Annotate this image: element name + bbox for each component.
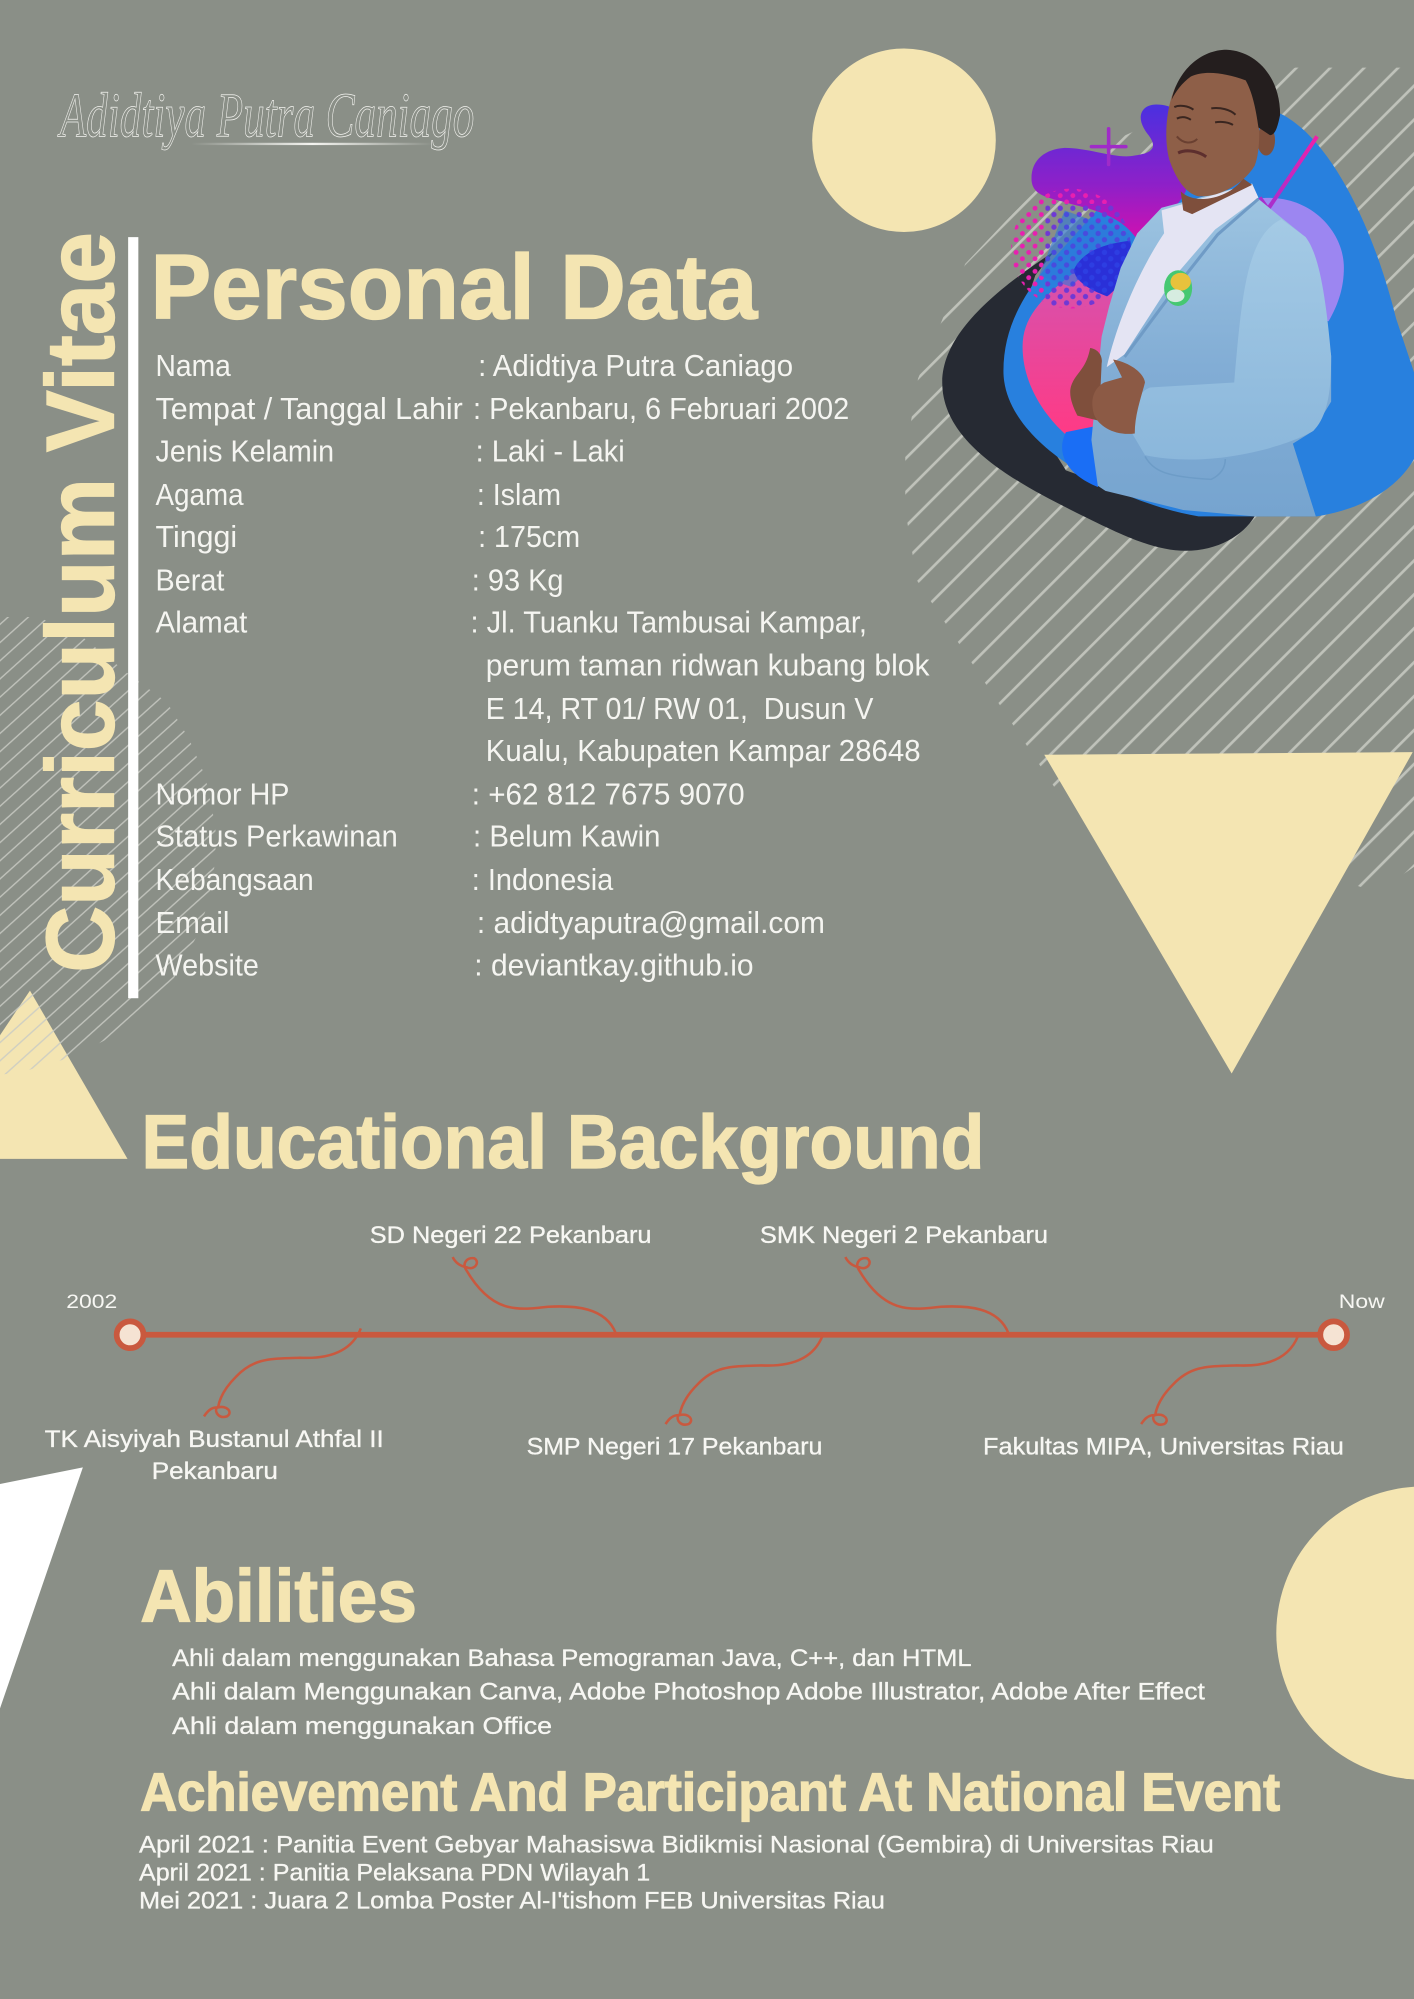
halftone dots	[1011, 188, 1131, 308]
jacket	[1091, 184, 1331, 516]
hair	[1172, 50, 1280, 135]
connector: SMK	[845, 1257, 1009, 1334]
achievement 1: April 2021 : Panitia Event Gebyar Mahasiswa Bidikmisi Nasional (Gembira) di Universitas Riau	[139, 1831, 1214, 1858]
row: jenis kelamin: Jenis Kelamin	[156, 435, 334, 469]
row: agama: Agama	[156, 478, 244, 512]
blue blob	[1003, 112, 1414, 516]
sleeve	[1132, 219, 1331, 459]
hatch pattern right	[905, 68, 1414, 892]
row: alamat	[156, 605, 930, 768]
label: SMP: SMP Negeri 17 Pekanbaru	[527, 1434, 822, 1461]
row: tempat tanggal lahir: : Pekanbaru, 6 Februari 2002	[473, 392, 849, 426]
row: alamat: perum taman ridwan kubang blok	[486, 649, 930, 683]
heading: achievement: Achievement And Participant At National Event	[140, 1763, 1280, 1822]
heading: abilities: Abilities	[140, 1555, 417, 1638]
label: TK: TK Aisyiyah Bustanul Athfal II	[45, 1426, 384, 1453]
label: SMK: SMK Negeri 2 Pekanbaru	[760, 1222, 1048, 1249]
row: agama	[156, 478, 561, 512]
achievement 2: April 2021 : Panitia Pelaksana PDN Wilayah 1	[139, 1859, 650, 1886]
white wedge left	[0, 1467, 83, 1708]
facial features	[1174, 106, 1235, 157]
row: berat: : 93 Kg	[472, 563, 564, 597]
row: email: : adidtyaputra@gmail.com	[477, 906, 825, 940]
violet circle	[1256, 198, 1344, 321]
row: status perkawinan: : Belum Kawin	[473, 820, 660, 854]
label: TK: Pekanbaru	[152, 1458, 278, 1485]
row: kebangsaan: : Indonesia	[472, 863, 613, 897]
row: nomor hp: : +62 812 7675 9070	[472, 777, 745, 811]
connector: Fakultas	[1141, 1336, 1298, 1425]
row: jenis kelamin	[156, 435, 625, 469]
decorative circle top	[812, 48, 996, 232]
badge	[1164, 270, 1192, 306]
row: nomor hp	[156, 777, 745, 811]
heading: personal data: Personal Data	[150, 237, 758, 339]
label: 2002: 2002	[66, 1291, 117, 1313]
row: nama	[156, 349, 793, 383]
plus mark	[1091, 129, 1126, 164]
pink shape	[1023, 273, 1148, 435]
row: tinggi: : 175cm	[478, 520, 580, 554]
row: tempat tanggal lahir	[156, 392, 849, 426]
row: berat: Berat	[156, 563, 225, 597]
purple blob	[1031, 105, 1192, 240]
portrait illustration	[942, 50, 1414, 551]
blue drop	[1062, 421, 1122, 487]
ability 2: Ahli dalam Menggunakan Canva, Adobe Photoshop Adobe Illustrator, Adobe After Effect	[172, 1678, 1205, 1705]
neck	[1181, 178, 1252, 214]
row: tempat tanggal lahir: Tempat / Tanggal Lahir	[156, 392, 463, 426]
row: email: Email	[156, 906, 230, 940]
row: tinggi	[156, 520, 580, 554]
row: alamat: Alamat	[156, 605, 248, 639]
label: TK	[45, 1426, 384, 1485]
ear	[1257, 125, 1275, 156]
lapel line	[1125, 199, 1258, 357]
decorative triangle right	[1044, 752, 1413, 1073]
row: website: : deviantkay.github.io	[474, 948, 754, 982]
label: now: Now	[1339, 1291, 1386, 1313]
ability 1: Ahli dalam menggunakan Bahasa Pemograman Java, C++, dan HTML	[172, 1645, 972, 1672]
row: alamat: Kualu, Kabupaten Kampar 28648	[486, 734, 921, 768]
row: alamat: E 14, RT 01/ RW 01, Dusun V	[486, 692, 874, 726]
decorative triangle left	[0, 991, 128, 1159]
row: jenis kelamin: : Laki - Laki	[476, 435, 625, 469]
heading: educational background: Educational Background	[142, 1100, 984, 1185]
signature: Adidtiya Putra Caniago	[57, 79, 474, 150]
ability 3: Ahli dalam menggunakan Office	[172, 1713, 552, 1740]
row: status perkawinan: Status Perkawinan	[156, 820, 398, 854]
connector: SD	[453, 1257, 616, 1334]
vertical title: Curriculum Vitae	[25, 232, 134, 973]
row: nama: : Adidtiya Putra Caniago	[478, 349, 793, 383]
end marker	[1320, 1321, 1347, 1348]
decorative circle bottom right	[1276, 1487, 1414, 1780]
row: kebangsaan: Kebangsaan	[156, 863, 314, 897]
pocket	[1145, 456, 1225, 479]
label: SD: SD Negeri 22 Pekanbaru	[370, 1222, 652, 1249]
personal data list	[156, 349, 930, 982]
dark blob	[942, 251, 1255, 551]
row: website: Website	[156, 948, 259, 982]
row: email	[156, 906, 825, 940]
timeline axis	[130, 1333, 1334, 1337]
row: kebangsaan	[156, 863, 613, 897]
label: Fakultas: Fakultas MIPA, Universitas Riau	[983, 1434, 1344, 1461]
achievement 3: Mei 2021 : Juara 2 Lomba Poster Al-I'tishom FEB Universitas Riau	[139, 1887, 885, 1914]
achievements list	[139, 1831, 1214, 1914]
face	[1166, 70, 1259, 196]
row: berat	[156, 563, 564, 597]
connector: SMP	[666, 1336, 822, 1425]
row: status perkawinan	[156, 820, 660, 854]
abilities list	[172, 1645, 1205, 1740]
education timeline	[45, 1222, 1386, 1485]
row: alamat: : Jl. Tuanku Tambusai Kampar,	[470, 605, 867, 639]
row: website	[156, 948, 754, 982]
row: agama: : Islam	[477, 478, 561, 512]
shirt	[1107, 184, 1258, 367]
vertical divider bar	[128, 237, 138, 998]
check mark	[1260, 136, 1317, 209]
right fist	[1092, 360, 1145, 434]
connector: TK	[204, 1328, 361, 1417]
row: nama: Nama	[156, 349, 231, 383]
hatch pattern left	[0, 617, 215, 1075]
left fist	[1070, 348, 1102, 421]
start marker	[117, 1321, 143, 1348]
row: nomor hp: Nomor HP	[156, 777, 289, 811]
row: tinggi: Tinggi	[156, 520, 237, 554]
